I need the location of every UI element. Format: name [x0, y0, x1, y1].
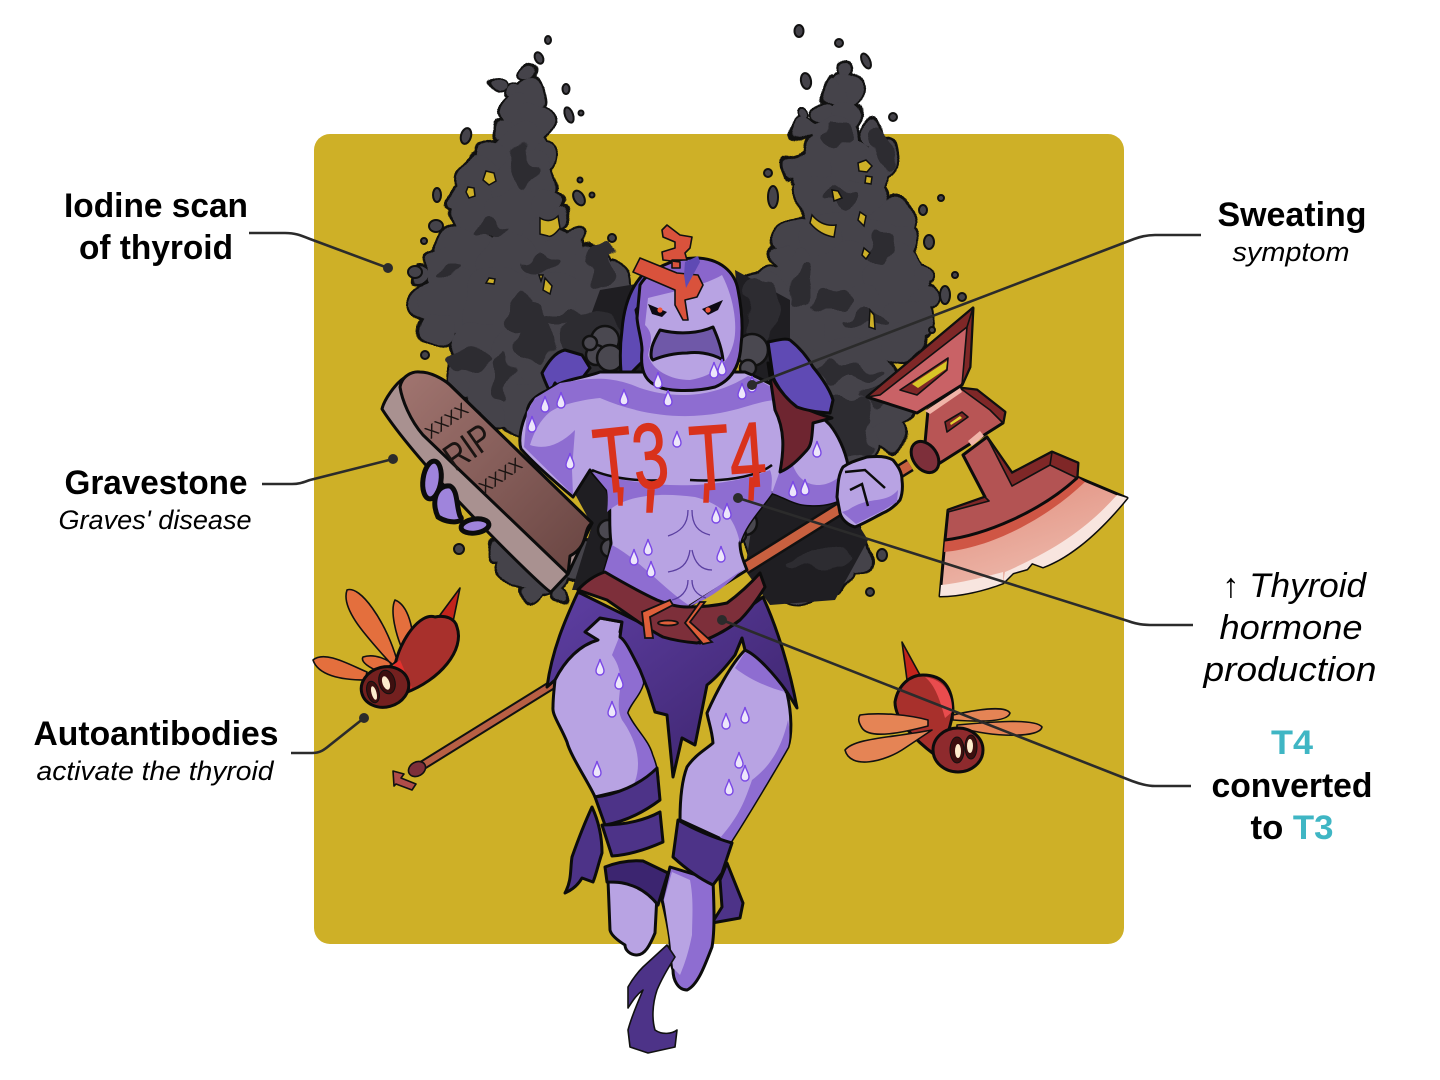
label: thyroid hormone production: production [1202, 651, 1376, 689]
axe lower head [945, 437, 1078, 540]
right mosquito body [895, 675, 953, 755]
eyes [648, 300, 723, 317]
leader line: sweating [747, 235, 1201, 390]
label: T4 converted to T3: converted [1212, 767, 1372, 805]
gravestone inscription: XXXX [475, 454, 526, 498]
right shoulder guard [768, 339, 833, 413]
hood back [620, 268, 655, 373]
smoke clouds [408, 25, 966, 607]
left knot ribbon [565, 807, 602, 893]
right foot [662, 867, 714, 990]
right mosquito head [933, 728, 983, 772]
label: autoantibodies: activate the thyroid [36, 756, 275, 786]
axe middle section [925, 388, 1005, 463]
torso shading [524, 376, 790, 543]
label: iodine scan of thyroid [64, 187, 248, 267]
belt buckle [642, 600, 712, 644]
leader line: thyroid hormone [733, 493, 1193, 625]
right leg [680, 650, 791, 843]
left mosquito spike [440, 588, 460, 622]
left mosquito wings [313, 590, 413, 680]
right fist [837, 456, 902, 527]
mouth [651, 327, 723, 360]
left mosquito body [395, 616, 458, 693]
label: gravestone: Graves' disease [58, 505, 252, 535]
label: iodine scan of thyroid: Iodine scan [64, 187, 248, 225]
torso and arms [520, 372, 849, 612]
axe [867, 308, 1127, 596]
label: thyroid hormone production [1202, 567, 1376, 689]
leg shading [612, 635, 790, 843]
smoke body with bumpy edge [410, 61, 936, 607]
leader line: T4 converted [717, 615, 1191, 786]
T3 T4 chest lettering: T4 [686, 404, 769, 511]
spear shaft [393, 465, 910, 790]
left leg [553, 618, 658, 797]
gravestone inscription: RIP [436, 416, 501, 479]
head [633, 225, 742, 391]
sweat drops on legs [593, 659, 749, 795]
axe blade [940, 477, 1127, 596]
axe top section [867, 308, 973, 413]
figure: purple warrior [520, 225, 902, 1053]
label: gravestone: Gravestone [64, 464, 248, 502]
right shoulder strap [768, 363, 832, 472]
gravestone inscription [421, 399, 526, 498]
mosquito: left [313, 588, 460, 713]
label: sweating: Sweating [1218, 196, 1366, 234]
chest lines [592, 465, 772, 600]
left mosquito head [357, 661, 413, 713]
leader line: autoantibodies [291, 713, 369, 753]
T3 T4 chest lettering [589, 404, 769, 513]
smoke: yellow gaps [466, 160, 875, 329]
left foot wrap [605, 861, 668, 905]
leader line: iodine scan [249, 233, 393, 273]
helmet crest lower [633, 258, 703, 320]
label: T4 converted to T3: T4 [1271, 724, 1313, 762]
leader line: gravestone [262, 454, 398, 484]
label: thyroid hormone production: hormone [1220, 609, 1362, 647]
label: autoantibodies [34, 715, 278, 786]
label: sweating [1218, 196, 1366, 267]
right ribbon [712, 863, 743, 923]
left foot [608, 880, 657, 955]
gravestone inscription: XXXX [421, 399, 472, 443]
smoke: dark backing behind the body [540, 270, 868, 605]
panel: mustard background [314, 134, 1124, 944]
left shoulder guard [542, 350, 590, 393]
belt [578, 572, 765, 643]
trailing ribbon [628, 945, 677, 1053]
T3 T4 chest lettering: T3 [589, 404, 673, 513]
smoke: small dark blobs by the neck and waist [583, 326, 768, 557]
right ankle wrap [673, 820, 732, 885]
label: thyroid hormone production: ↑ Thyroid [1222, 567, 1367, 605]
label: iodine scan of thyroid: of thyroid [79, 229, 233, 267]
axe collar [905, 436, 945, 478]
helmet crest upper [662, 225, 692, 268]
left leg wraps [565, 768, 663, 893]
smoke droplets [408, 25, 966, 596]
label: T4 converted to T3: to T3 [1250, 809, 1334, 847]
mosquito: right [845, 642, 1042, 772]
right mosquito wings [845, 709, 1042, 762]
label: autoantibodies: Autoantibodies [34, 715, 278, 753]
arrow head [393, 771, 416, 790]
sweat drops [528, 359, 821, 577]
gravestone fingers [420, 460, 490, 535]
label: gravestone [58, 464, 252, 535]
gravestone [382, 372, 592, 592]
label: T4 converted to T3 [1212, 724, 1372, 847]
smoke: dark shadow patches [432, 125, 900, 570]
label: sweating: symptom [1232, 237, 1350, 267]
right mosquito spike [902, 642, 920, 680]
loincloth [547, 592, 797, 777]
